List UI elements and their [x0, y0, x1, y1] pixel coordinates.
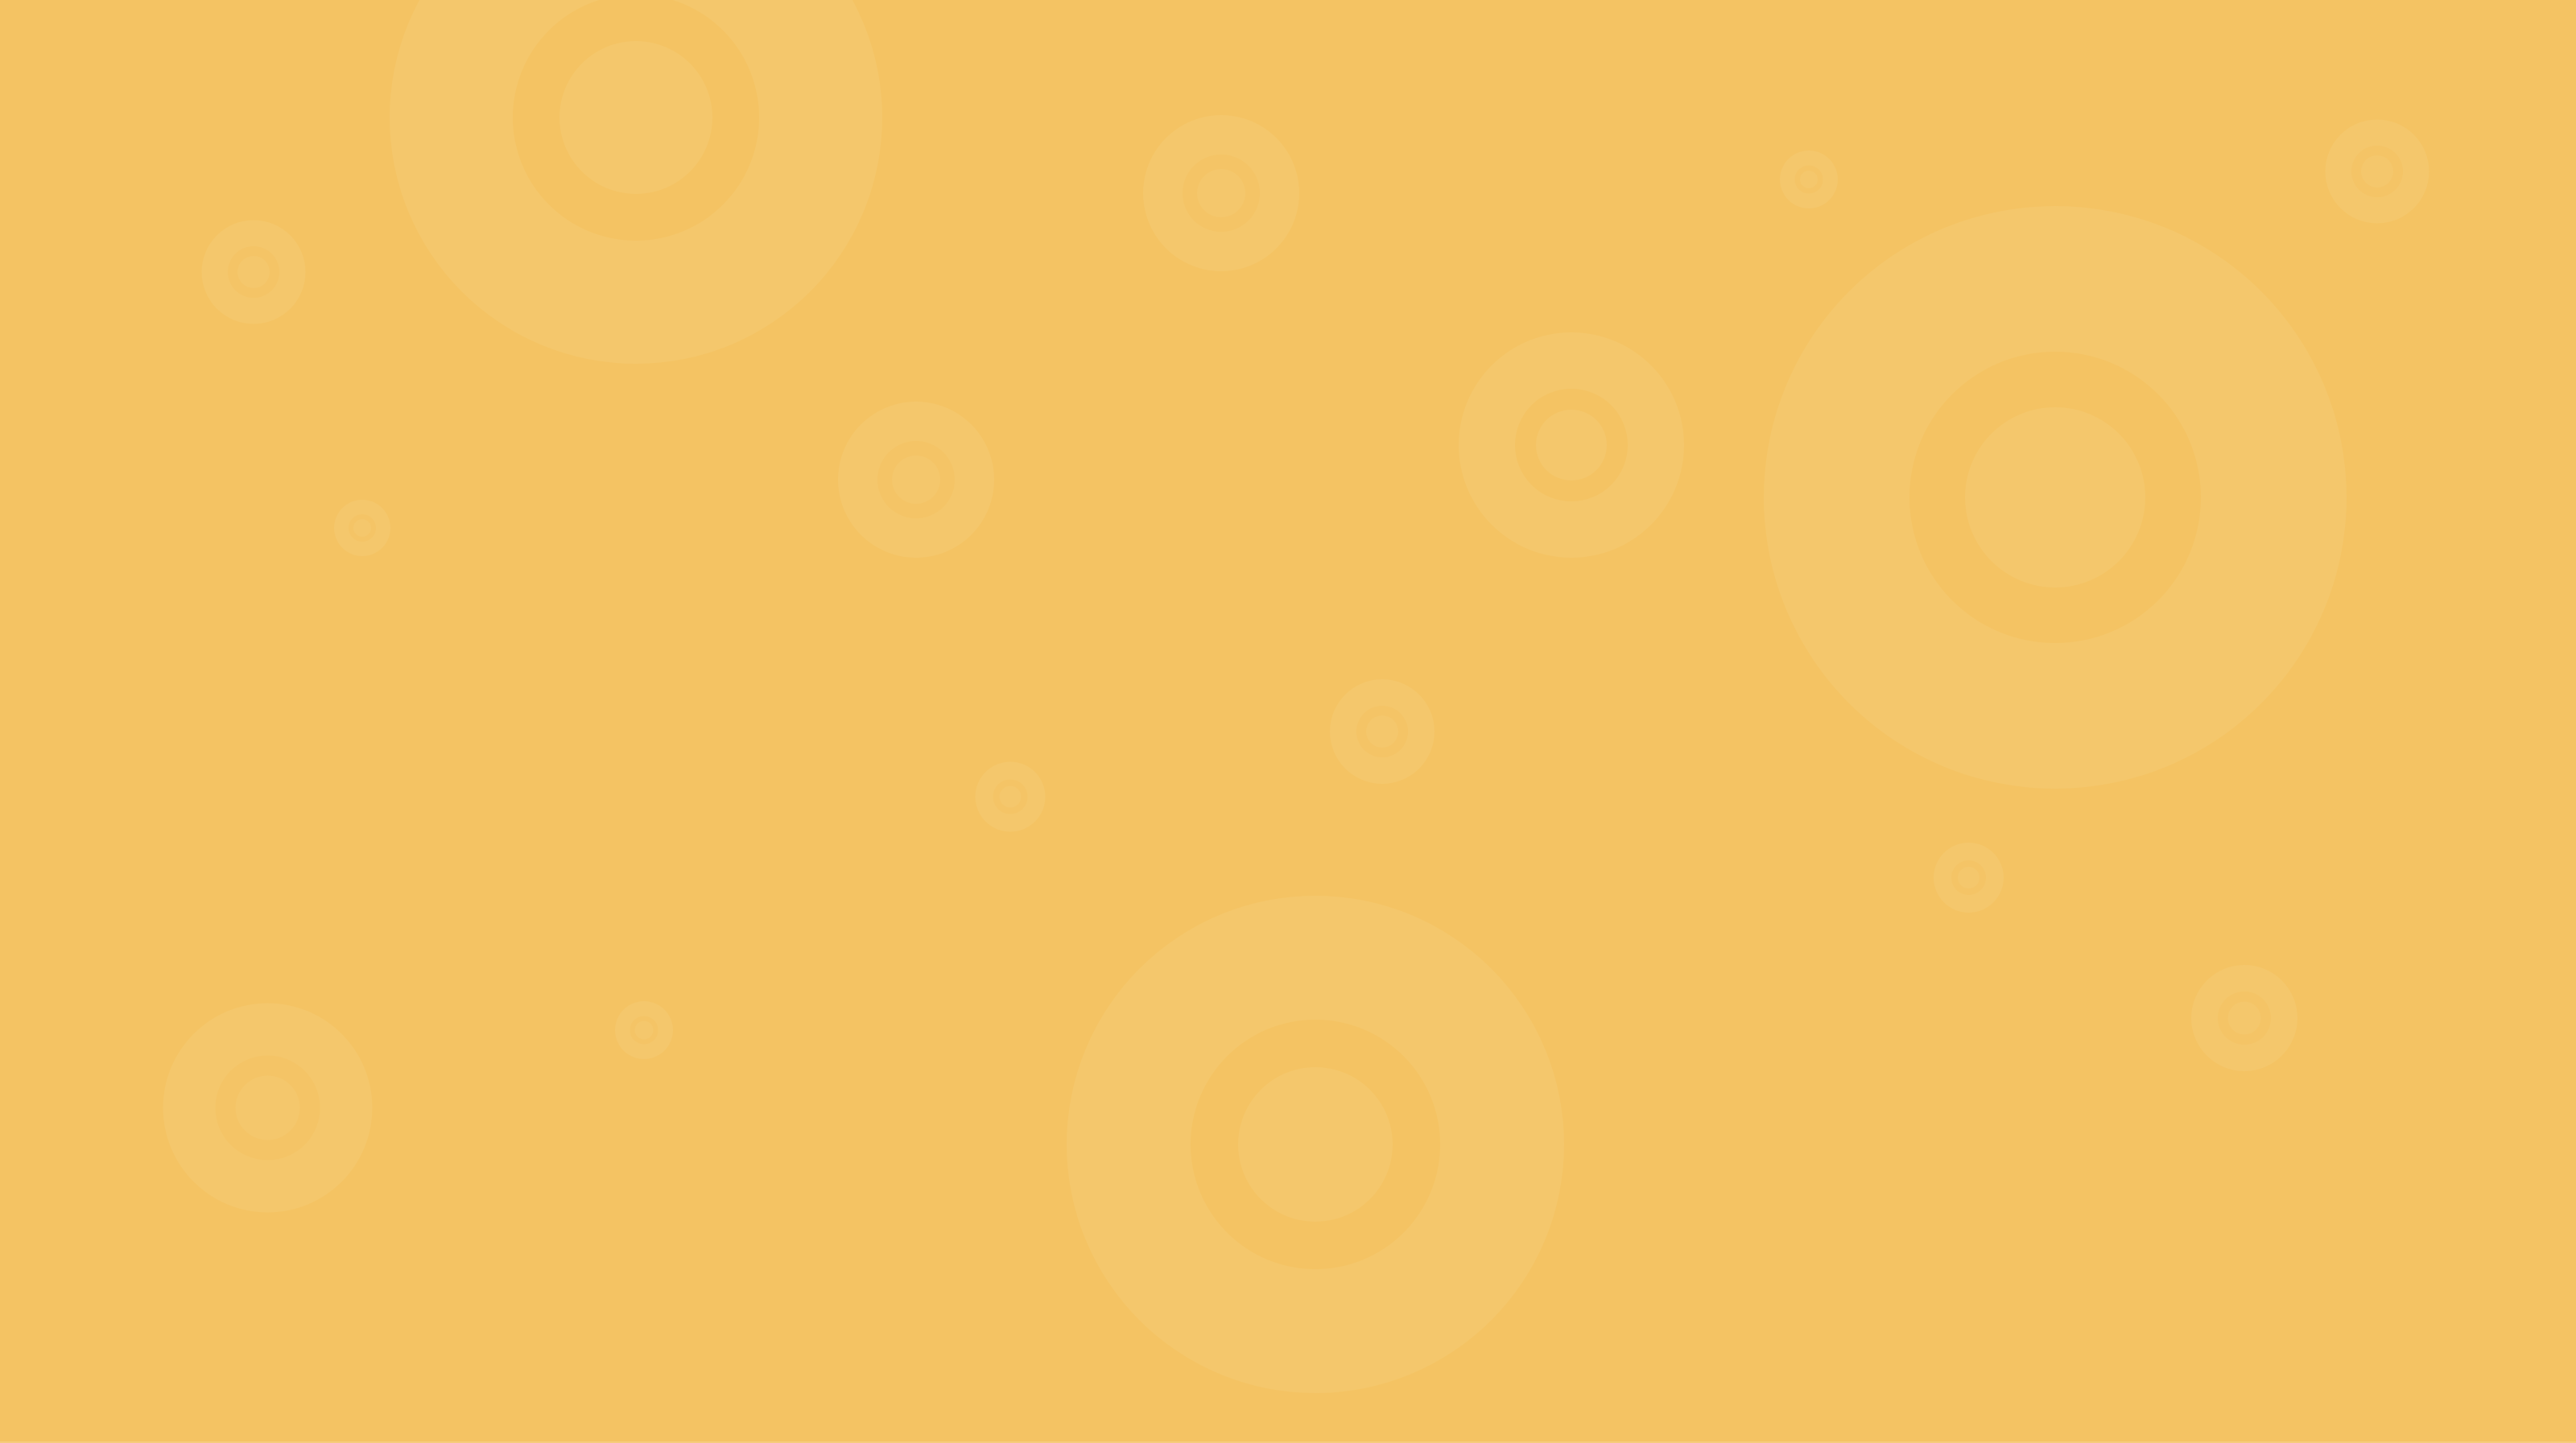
ring: medium centre left	[838, 402, 994, 558]
ring: large top left	[390, 0, 882, 364]
ring: small centre	[1330, 679, 1435, 784]
ring: medium bottom left	[163, 1003, 372, 1212]
ring: small mid left	[976, 761, 1045, 832]
ring: largest right	[1764, 206, 2347, 789]
ring: small left	[201, 221, 306, 324]
ring: tiny top right of centre	[1780, 150, 1838, 208]
ring: small top right	[2325, 119, 2429, 224]
ring: tiny left	[334, 500, 390, 556]
ring: top centre	[1143, 115, 1299, 271]
ring: medium centre	[1459, 332, 1684, 558]
ring: tiny bottom left	[615, 1001, 673, 1059]
ring: small mid right	[1934, 843, 2004, 913]
ring: small lower right	[2191, 965, 2297, 1071]
ring: large bottom centre	[1067, 896, 1564, 1393]
